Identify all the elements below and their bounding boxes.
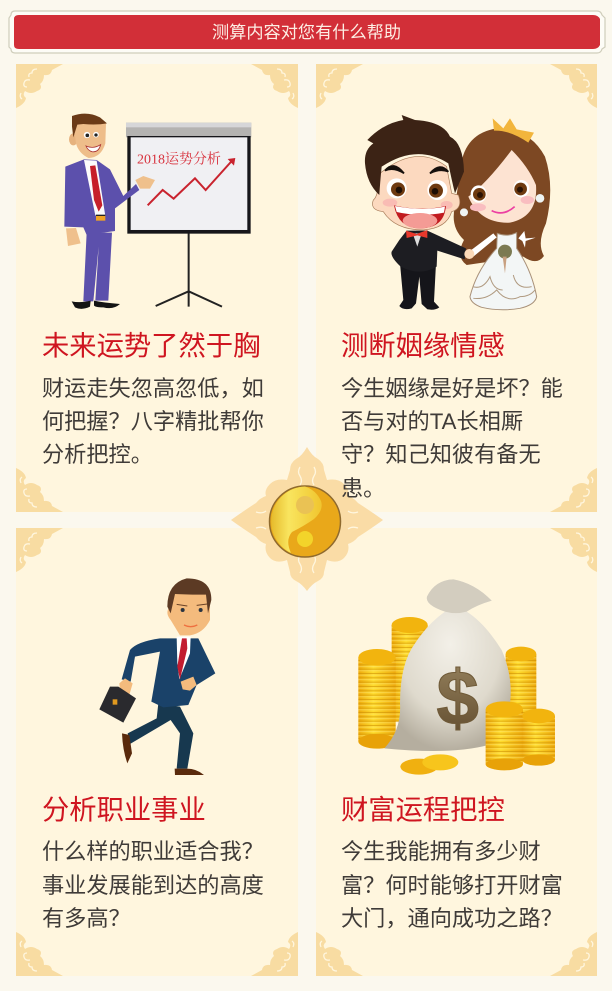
- body text: 分析把控。: [42, 442, 153, 467]
- body text: 否与对的TA长相厮: [341, 409, 523, 434]
- body text: 患。: [341, 476, 385, 501]
- illustration: running businessman: [99, 578, 215, 775]
- heading: 测断姻缘情感: [341, 330, 505, 361]
- header banner: [9, 11, 605, 53]
- body text: 守？知己知彼有备无: [341, 442, 541, 467]
- illustration: bride and groom: [365, 115, 550, 310]
- header text: 测算内容对您有什么帮助: [212, 22, 401, 42]
- body text: 今生姻缘是好是坏？能: [341, 376, 563, 401]
- body text: 大门，通向成功之路？: [341, 906, 563, 931]
- central ornament: yin-yang medallion: [231, 447, 383, 591]
- panel: wealth: [316, 528, 597, 976]
- body text: 事业发展能到达的高度: [42, 873, 264, 898]
- panel: career: [16, 528, 298, 976]
- body text: 今生我能拥有多少财: [341, 839, 541, 864]
- heading: 分析职业事业: [42, 794, 206, 825]
- heading: 财富运程把控: [341, 794, 505, 825]
- panel: marriage: [316, 64, 597, 512]
- body text: 财运走失忽高忽低，如: [42, 376, 264, 401]
- dollar sign: $: [436, 656, 479, 741]
- body text: 有多高？: [42, 906, 131, 931]
- body text: 什么样的职业适合我？: [42, 839, 264, 864]
- illustration: money bag and gold coins: [358, 579, 555, 775]
- heading: 未来运势了然于胸: [42, 330, 260, 361]
- panel: future fortune: [16, 64, 298, 512]
- body text: 何把握？八字精批帮你: [42, 409, 264, 434]
- illustration: businessman with chart board: 2018运势分析: [137, 151, 221, 168]
- body text: 富？何时能够打开财富: [341, 873, 563, 898]
- illustration: businessman with chart board: [64, 114, 251, 309]
